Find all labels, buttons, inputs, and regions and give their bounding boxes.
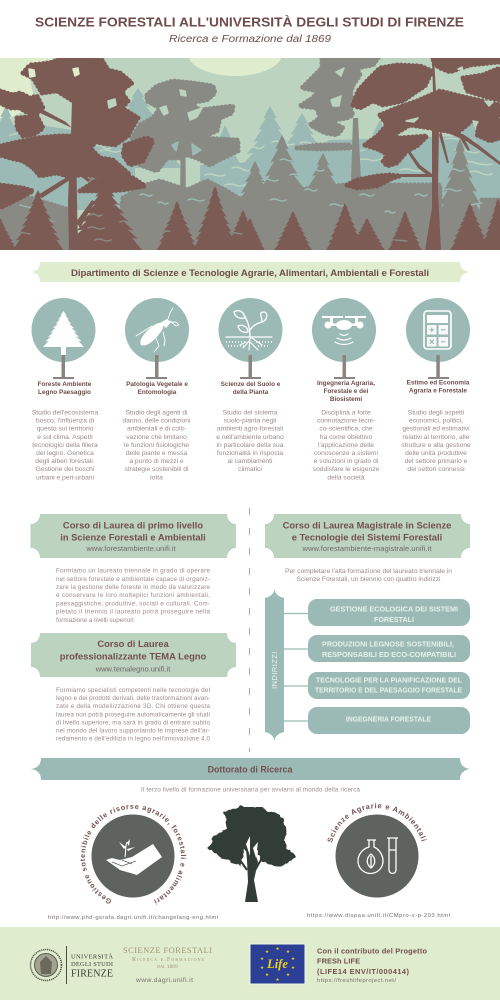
heading: patologia: Entomologia	[138, 389, 177, 396]
icon: white pine tree on stem	[32, 298, 96, 379]
text: suolo: ambienti agro-forestali	[217, 426, 284, 433]
banner	[31, 633, 236, 677]
text: estimo: economici, politici,	[409, 418, 463, 425]
text: patologia: le funzioni fisiologiche	[124, 442, 189, 449]
text: estimo: Studio degli aspetti	[408, 410, 465, 416]
heading: foreste: Legno Paesaggio	[38, 389, 91, 396]
text: suolo: suolo-pianta negli	[224, 418, 277, 425]
heading: ingegneria: Ingegneria Agraria,	[317, 380, 375, 387]
pill: tecnologie: TECNOLOGIE PER LA PIANIFICAZIONE DEL	[316, 676, 463, 684]
logo: scienze forestali	[123, 946, 212, 984]
panel: laurea professionalizzante	[31, 633, 236, 743]
text: formazione a livelli superiori	[56, 617, 134, 624]
text: di livello superiore, ma sarà in grado di entrare subito	[56, 719, 210, 726]
pill: gestione ecologica: FORESTALI	[374, 615, 414, 624]
text: ingegneria: Disciplina a forte	[321, 410, 371, 416]
text: Formiamo specialisti competenti nelle tecnologie del	[56, 687, 210, 694]
text: suolo: Studio del sistema	[223, 410, 278, 416]
logo: EU Life: ★	[291, 965, 296, 970]
panel: laurea magistrale	[265, 514, 470, 741]
heading: patologia: Patologia Vegetale e	[126, 381, 188, 388]
heading: patologia	[126, 381, 188, 396]
badge: scienze agrarie	[328, 802, 427, 898]
text: patologia: vazione che limitano	[126, 434, 187, 441]
text: foreste: Studio dell'ecosistema	[32, 410, 98, 416]
text: ingegneria: co-scientifica, che	[319, 426, 373, 433]
logo: EU Life: ★	[265, 949, 270, 954]
logo: scienze forestali: www.dagri.unifi.it	[135, 977, 193, 984]
banner: www.forestambiente.unifi.it	[85, 544, 177, 553]
logo: EU Life	[250, 944, 305, 984]
text: patologia: danno, delle condizioni	[122, 418, 191, 425]
logo: EU Life: ★	[275, 977, 280, 982]
text: ingegneria: della società	[327, 474, 365, 481]
text: foreste: Gestione dei boschi	[36, 466, 95, 473]
pill: tecnologie	[308, 672, 470, 699]
text: dottorato intro: Il terzo livello di formazione universitaria per avviarsi al mondo della ricerca	[141, 786, 361, 794]
text	[56, 687, 210, 743]
text: pletato il triennio il laureato potrà proseguire nella	[56, 609, 210, 616]
logo: EU Life: ★	[265, 972, 270, 977]
forest illustration	[0, 58, 500, 250]
text: patologia: lotta	[150, 474, 163, 481]
text: laurea non potrà proseguire automaticamente gli studi	[56, 711, 210, 718]
icon: plant with roots on stem	[218, 298, 282, 379]
pill: produzioni legnose: PRODUZIONI LEGNOSE SOSTENIBILI,	[322, 640, 454, 648]
circular label: Gestione sotenibile delle risorse agrarie, forestali e alimentari	[80, 805, 186, 905]
logo: università di firenze: DEGLI STUDI	[71, 961, 113, 968]
logo: EU Life: ★	[291, 956, 296, 961]
brown foreground trees	[0, 58, 500, 250]
heading: estimo	[407, 380, 470, 394]
logo: scienze forestali: SCIENZE FORESTALI	[123, 946, 212, 955]
logo: EU Life: ★	[286, 949, 291, 954]
banner: professionalizzante TEMA Legno	[60, 650, 207, 662]
text: estimo: delle unità produttive	[405, 450, 467, 457]
banner: www.temalegno.unifi.it	[95, 664, 171, 674]
text: foreste: tecnologici della filiera	[32, 442, 98, 449]
banner: dottorato: Dottorato di Ricerca	[208, 764, 292, 774]
banner	[30, 514, 236, 558]
column: patologia	[122, 298, 191, 481]
text: nel mondo del lavoro supportando le imprese dell'ar-	[56, 728, 210, 734]
heading: estimo: Estimo ed Economia	[407, 380, 470, 386]
pill: ingegneria forestale: INGEGNERIA FORESTALE	[346, 714, 431, 724]
logo: EU Life: ★	[275, 946, 280, 951]
link: dottorato sinistra: http://www.phd-gsrafa.dagri.unifi.it/changelang-eng.html	[48, 915, 218, 921]
icon: flask and test tube	[358, 838, 398, 874]
text	[56, 568, 210, 624]
text: Scienze Forestali, un biennio con quattro indirizzi	[296, 576, 441, 583]
badge: risorse agrarie	[80, 805, 186, 905]
heading: suolo: della Pianta	[233, 389, 269, 396]
text: patologia: delle piante e messa	[126, 450, 187, 457]
column: estimo	[401, 298, 471, 473]
heading: suolo	[221, 381, 281, 396]
banner: e Tecnologie dei Sistemi Forestali	[292, 532, 442, 542]
gaps in grey canopies	[160, 68, 344, 120]
icon: hand with sprout	[106, 839, 162, 875]
text: Formiamo un laureato triennale in grado di operare	[56, 568, 210, 575]
link: dottorato destra: https://www.dispaa.unifi.it/CMpro-v-p-203.html	[307, 913, 450, 919]
text: ingegneria: ha come obiettivo	[320, 434, 372, 441]
text: estimo: del settore primario e	[405, 458, 468, 465]
text: ingegneria: e soluzioni in grado di	[314, 458, 379, 465]
text: legno e dei prodotti derivati, delle trasformazioni avan-	[56, 695, 210, 702]
heading: foreste	[38, 381, 92, 396]
text: ingegneria	[313, 410, 380, 481]
column: foreste	[32, 298, 98, 481]
text: foreste: del legno. Genetica	[36, 450, 94, 457]
logo: EU Life: Life	[266, 957, 288, 971]
pill: tecnologie: TERRITORIO E DEL PAESAGGIO FORESTALE	[315, 686, 462, 694]
text: patologia: a punto di mezzi e	[129, 458, 184, 465]
text: suolo: in particolare della sua	[217, 442, 284, 449]
logo: università di firenze	[30, 946, 113, 984]
text: suolo: funzionalità in risposta	[217, 450, 283, 457]
text: nel settore forestale e ambientale capace di organiz-	[56, 576, 210, 583]
text: suolo: climatici	[238, 466, 262, 473]
text: suolo: ai cambiamenti	[228, 458, 273, 465]
banner: Corso di Laurea Magistrale in Scienze	[283, 520, 451, 530]
text: e conservare le loro molteplici funzioni ambientali,	[56, 592, 210, 599]
subtitle: Ricerca e Formazione dal 1869	[169, 34, 331, 45]
logo: EU Life: ★	[260, 965, 265, 970]
text: patologia: Studio degli agenti di	[125, 410, 188, 416]
text: estimo: dei settori connessi	[407, 466, 465, 473]
text: ingegneria: connotazione tecni-	[317, 418, 375, 425]
banner: dipartimento	[31, 262, 470, 282]
text: patologia	[122, 410, 191, 481]
title: SCIENZE FORESTALI ALL'UNIVERSITÀ DEGLI STUDI DI FIRENZE	[35, 14, 464, 30]
text: foreste	[32, 410, 98, 481]
grey canopy centre-left	[132, 81, 238, 171]
text: estimo: relativi al territorio, alle	[403, 434, 470, 441]
footer	[0, 927, 500, 1000]
indirizzi ribbon	[265, 589, 284, 741]
pill: produzioni legnose: RESPONSABILI ED ECO-COMPATIBILI	[322, 650, 456, 659]
circular label: Scienze Agrarie e Ambientali	[328, 802, 427, 842]
text: foreste: urbani e peri-urbani	[36, 474, 95, 481]
text: progetto: FRESh LIFE	[317, 956, 360, 966]
text: estimo	[401, 410, 471, 473]
banner: www.forestambiente-magistrale.unifi.it	[302, 544, 432, 553]
text: estimo: gestionali ed estimativi	[402, 426, 470, 433]
text: ingegneria: l'applicazione delle	[318, 442, 374, 449]
banner	[265, 514, 470, 558]
text: estimo: strutture e alla gestione	[401, 442, 471, 449]
logo: scienze forestali: dal 1869	[157, 964, 178, 970]
logo: EU Life: ★	[286, 972, 291, 977]
pill: gestione ecologica: GESTIONE ECOLOGICA DEI SISTEMI	[330, 604, 458, 614]
logo: università di firenze: FIRENZE	[71, 968, 113, 980]
column: ingegneria	[312, 298, 380, 481]
text: foreste: e sul clima. Aspetti	[37, 434, 93, 441]
logo: EU Life: ★	[260, 956, 265, 961]
text: progetto: https://freshlifeproject.net/	[317, 978, 396, 984]
text: progetto: Con il contributo del Progetto	[317, 946, 427, 956]
logo: scienze forestali: Ricerca e Formazione	[132, 957, 205, 963]
text: patologia: strategie sostenibili di	[125, 466, 189, 473]
text: paesaggistiche, produttive, sociali e culturali. Com-	[56, 600, 210, 607]
text: progetto	[317, 946, 427, 984]
foliage gaps	[29, 67, 493, 126]
heading: foreste: Foreste Ambiente	[38, 381, 92, 388]
text: Per completare l'alta formazione del laureato triennale in	[285, 568, 452, 575]
text: ingegneria: soddisfare le esigenze	[313, 466, 380, 473]
text: zate e della modellizzazione 3D. Chi ottiene questa	[56, 703, 210, 710]
pill: ingegneria forestale	[308, 707, 470, 734]
icon: beetle on stem	[125, 298, 189, 379]
heading: suolo: Scienze del Suolo e	[221, 381, 281, 388]
text: ingegneria: conoscenze a sistemi	[314, 450, 378, 457]
icon: dark tree	[208, 807, 297, 902]
text: suolo	[216, 410, 284, 473]
banner: dottorato	[31, 758, 470, 780]
text: progetto: (LIFE14 ENV/IT/000414)	[317, 967, 410, 976]
text: suolo: e nell'ambiente urbano	[216, 434, 284, 441]
banner: dipartimento: Dipartimento di Scienze e Tecnologie Agrarie, Alimentari, Ambientali e Forestali	[71, 268, 429, 279]
grey trees layer	[0, 58, 500, 250]
icon: calculator on stem	[406, 298, 470, 379]
heading: estimo: Agraria e Forestale	[409, 388, 467, 394]
pill: produzioni legnose	[308, 635, 470, 662]
logo: università di firenze: UNIVERSITÀ	[71, 952, 113, 960]
icon: drone on stem	[312, 298, 376, 379]
text: foreste: questo sul territorio	[37, 426, 94, 433]
text: patologia: ambientali e di colti-	[127, 426, 186, 433]
banner: Corso di Laurea di primo livello	[63, 520, 203, 530]
banner: Corso di Laurea	[97, 638, 169, 649]
text: foreste: degli alberi forestali.	[35, 458, 95, 465]
panel: laurea primo livello	[30, 514, 236, 624]
indirizzi ribbon: INDIRIZZI	[270, 651, 279, 689]
pill: gestione ecologica	[308, 599, 470, 626]
heading: ingegneria: Forestale e dei	[324, 388, 369, 395]
text: foreste: bosco, l'influenza di	[36, 418, 95, 425]
column: suolo	[216, 298, 284, 473]
banner: in Scienze Forestali e Ambientali	[60, 532, 206, 542]
text: redamento e dell'edilizia in legno nell'innovazione 4.0	[56, 736, 210, 743]
text	[285, 568, 452, 583]
text: zare la gestione delle foreste in modo da valorizzare	[56, 584, 210, 591]
heading: ingegneria	[317, 380, 375, 403]
heading: ingegneria: Biosistemi	[330, 396, 362, 403]
